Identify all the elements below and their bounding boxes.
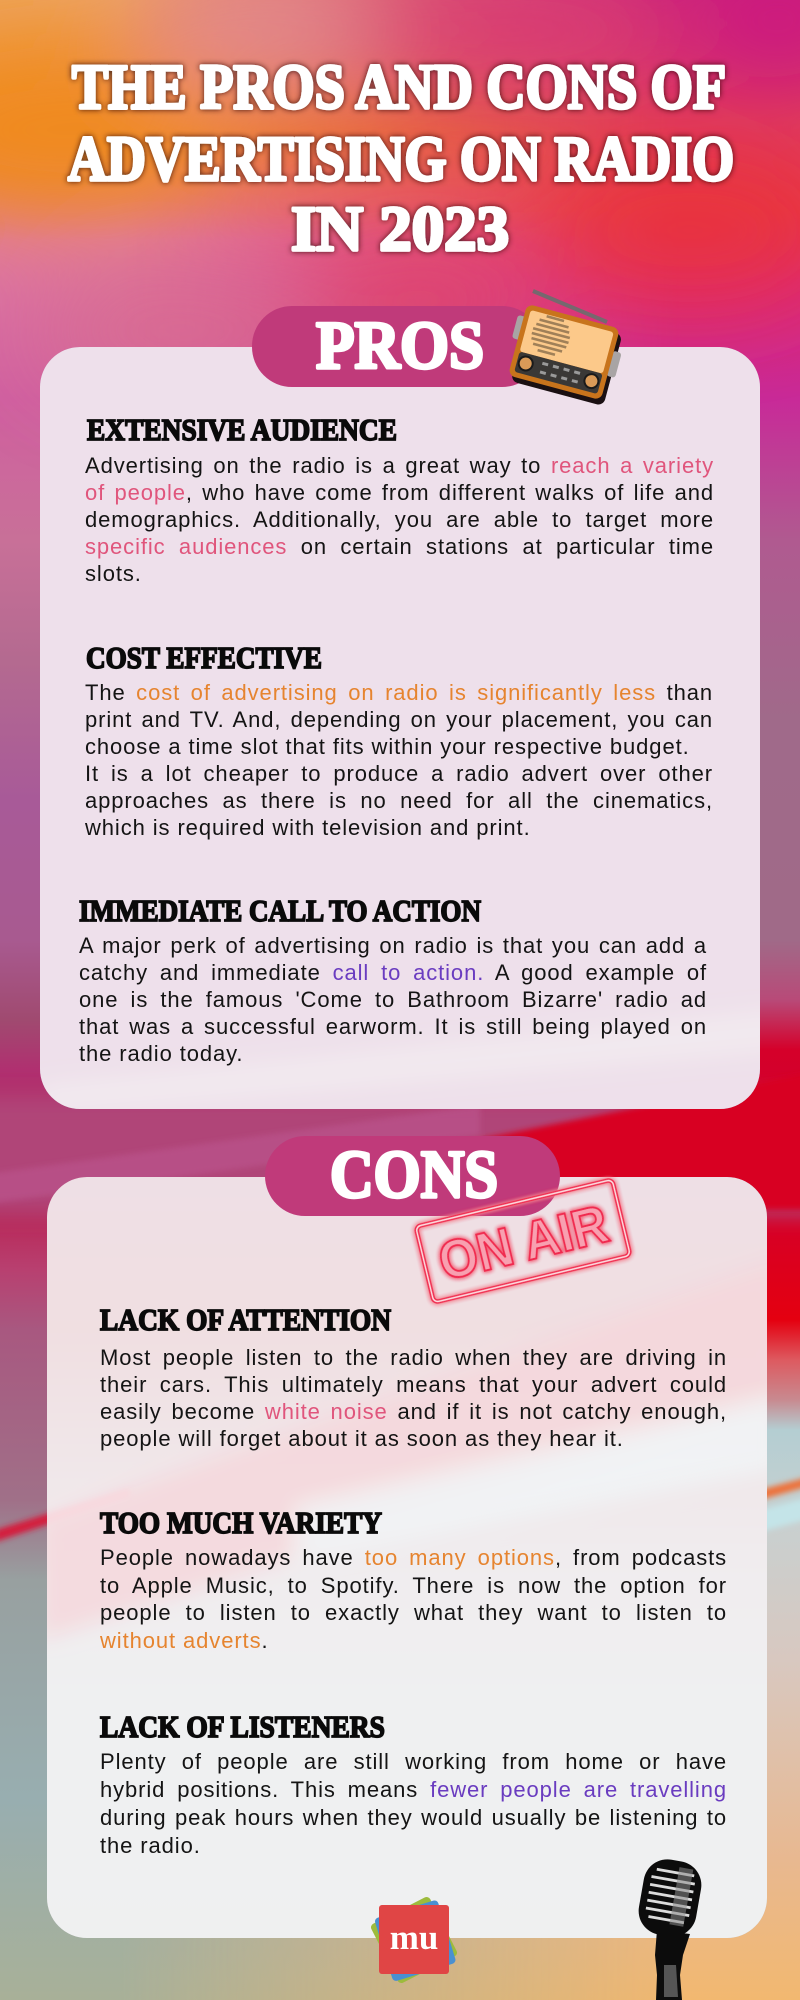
text: extensive audience: Advertising on the radio is a great way to reach a variety: [85, 453, 714, 478]
text: lack of attention: people will forget about it as soon as they hear it.: [100, 1426, 624, 1451]
text: immediate call to action: A major perk of advertising on radio is that you can add a: [79, 933, 707, 958]
logo: mu: mu: [390, 1918, 438, 1957]
text: extensive audience: specific audiences on certain stations at particular time: [85, 534, 714, 559]
text: immediate call to action: that was a successful earworm. It is still being played on: [79, 1014, 707, 1039]
heading: lack of attention: LACK OF ATTENTION: [100, 1302, 391, 1337]
heading: extensive audience: EXTENSIVE AUDIENCE: [87, 412, 397, 447]
text: immediate call to action: one is the famous 'Come to Bathroom Bizarre' radio ad: [79, 987, 707, 1012]
text: cost effective: [85, 680, 713, 840]
text: extensive audience: demographics. Additionally, you are able to target more: [85, 507, 714, 532]
text: immediate call to action: [79, 933, 707, 1066]
title: [68, 51, 734, 264]
pros heading pill: [252, 306, 542, 387]
icon: radio: [501, 291, 628, 407]
icon: on air neon sign: ON AIR: [433, 1194, 614, 1292]
text: lack of listeners: hybrid positions. This means fewer people are travelling: [100, 1777, 727, 1802]
text: cost effective: print and TV. And, depending on your placement, you can: [85, 707, 713, 732]
cons heading pill: CONS: [330, 1136, 498, 1212]
heading: lack of listeners: LACK OF LISTENERS: [100, 1709, 385, 1744]
heading: cost effective: COST EFFECTIVE: [86, 640, 322, 675]
logo: mu: [370, 1896, 458, 1984]
text: too much variety: People nowadays have too many options, from podcasts: [100, 1545, 727, 1570]
text: too much variety: without adverts.: [100, 1628, 268, 1653]
panel: pros: [40, 347, 760, 1109]
text: immediate call to action: catchy and immediate call to action. A good example of: [79, 960, 707, 985]
heading: immediate call to action: IMMEDIATE CALL TO ACTION: [79, 893, 481, 928]
icon: microphone: [635, 1856, 705, 2000]
text: immediate call to action: the radio today.: [79, 1041, 243, 1066]
text: lack of attention: their cars. This ultimately means that your advert could: [100, 1372, 727, 1397]
pros heading pill: PROS: [316, 307, 484, 383]
text: cost effective: approaches as there is no need for all the cinematics,: [85, 788, 713, 813]
text: too much variety: people to listen to exactly what they want to listen to: [100, 1600, 727, 1625]
text: lack of attention: Most people listen to the radio when they are driving in: [100, 1345, 727, 1370]
title: IN 2023: [291, 193, 509, 264]
text: lack of attention: [100, 1345, 727, 1451]
text: cost effective: choose a time slot that fits within your respective budget.: [85, 734, 690, 759]
text: cost effective: The cost of advertising on radio is significantly less than: [85, 680, 713, 705]
text: cost effective: It is a lot cheaper to produce a radio advert over other: [85, 761, 713, 786]
text: lack of attention: easily become white noise and if it is not catchy enough,: [100, 1399, 727, 1424]
text: lack of listeners: [100, 1749, 727, 1858]
text: extensive audience: slots.: [85, 561, 142, 586]
text: extensive audience: [85, 453, 714, 586]
text: extensive audience: of people, who have come from different walks of life and: [85, 480, 714, 505]
panel: cons: [47, 1177, 767, 1938]
text: lack of listeners: the radio.: [100, 1833, 201, 1858]
text: lack of listeners: during peak hours when they would usually be listening to: [100, 1805, 727, 1830]
cons heading pill: [265, 1136, 560, 1216]
text: too much variety: [100, 1545, 727, 1653]
heading: too much variety: TOO MUCH VARIETY: [100, 1505, 382, 1540]
text: lack of listeners: Plenty of people are still working from home or have: [100, 1749, 727, 1774]
text: too much variety: to Apple Music, to Spotify. There is now the option for: [100, 1573, 727, 1598]
text: cost effective: which is required with television and print.: [85, 815, 531, 840]
